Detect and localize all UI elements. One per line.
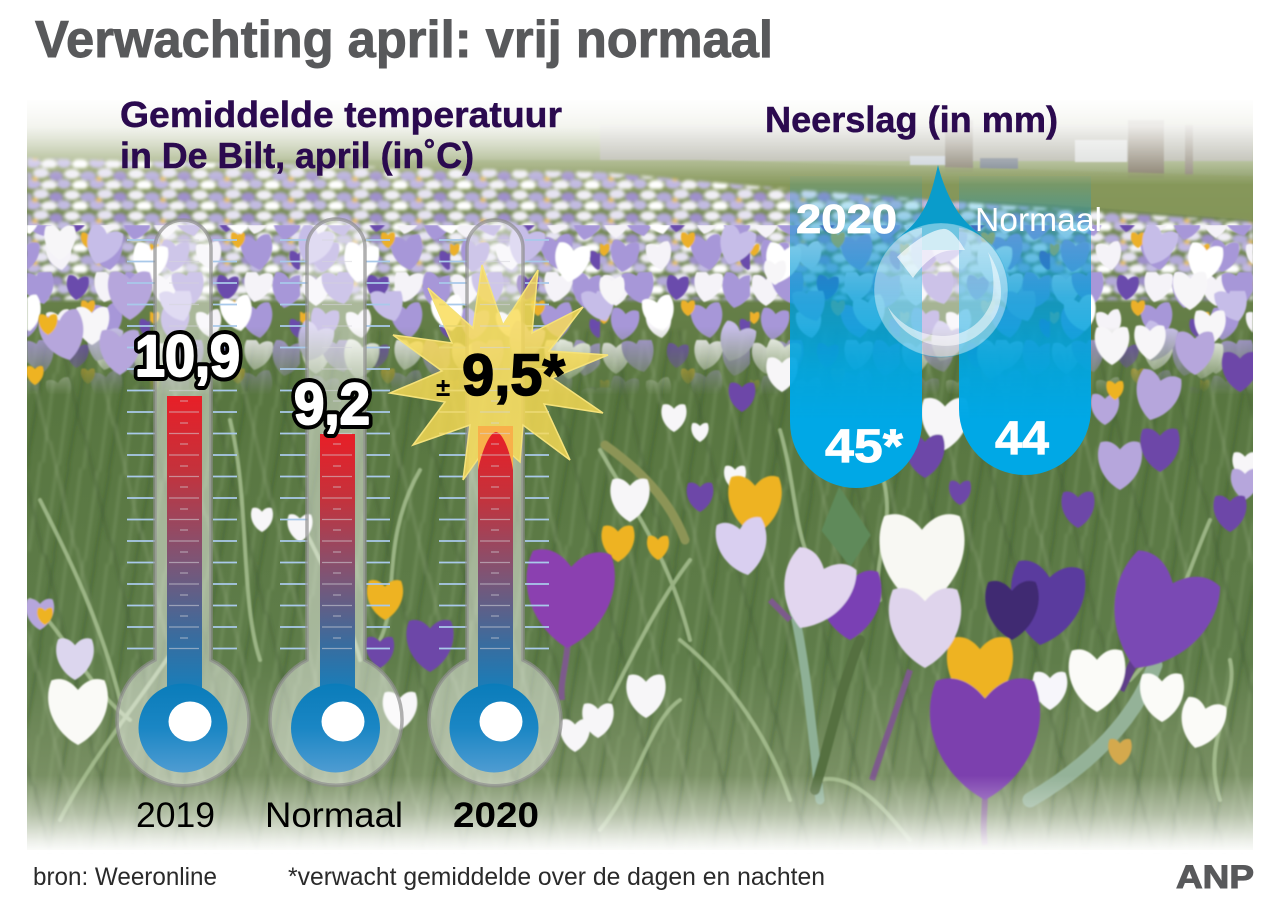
value 44: 44: [995, 411, 1049, 464]
label 2019: 2019: [136, 796, 215, 835]
background olive lawn: [27, 160, 1253, 220]
value 10,9: 10,9: [135, 324, 240, 389]
heading: precipitation: Neerslag (in mm): [765, 99, 1058, 140]
label 2020: 2020: [453, 796, 539, 835]
value 9,2: 9,2: [294, 372, 370, 437]
drop normaal: [959, 176, 1091, 475]
background distant trees and buildings: [600, 120, 1253, 178]
thermometer 2019: [117, 220, 249, 786]
background near crocus band: [27, 225, 1253, 395]
source: bron: Weeronline: [33, 863, 217, 891]
value 9,5: ±: [436, 372, 450, 402]
heading: temperature: Gemiddelde temperatuur: [120, 94, 562, 135]
bottom white fade: [0, 775, 1280, 853]
thermometer normaal: [270, 219, 402, 785]
drop highlight: [874, 222, 1008, 357]
background scattered crocus flowers: [26, 225, 1259, 752]
title: Verwachting april: vrij normaal: [35, 11, 773, 69]
value 10,9: 10,9: [135, 324, 240, 389]
value 9,2: 9,2: [294, 372, 370, 437]
background grass texture: [27, 330, 1253, 850]
background far crocus band: [27, 158, 1253, 300]
heading: temperature: [120, 94, 562, 176]
ANP logo: ANP: [1176, 859, 1254, 895]
value 45: 45*: [825, 419, 904, 472]
label 2020 rain: 2020: [796, 196, 897, 242]
label normaal rain: Normaal: [975, 201, 1102, 238]
large crocus flowers: [48, 476, 1229, 845]
drop 2020: [790, 176, 922, 488]
label Normaal: Normaal: [265, 796, 403, 835]
footnote: *verwacht gemiddelde over de dagen en nachten: [288, 863, 825, 891]
rain drops chart: [790, 165, 1102, 488]
central falling drop: [898, 165, 984, 238]
thermometer 2020: [390, 220, 608, 786]
heading: temperature: in De Bilt, april (in˚C): [120, 135, 474, 176]
background grass blades: [30, 420, 1232, 840]
sun burst: [390, 265, 608, 480]
value 9,5: 9,5*: [462, 343, 565, 408]
top white fade: [0, 95, 1280, 185]
